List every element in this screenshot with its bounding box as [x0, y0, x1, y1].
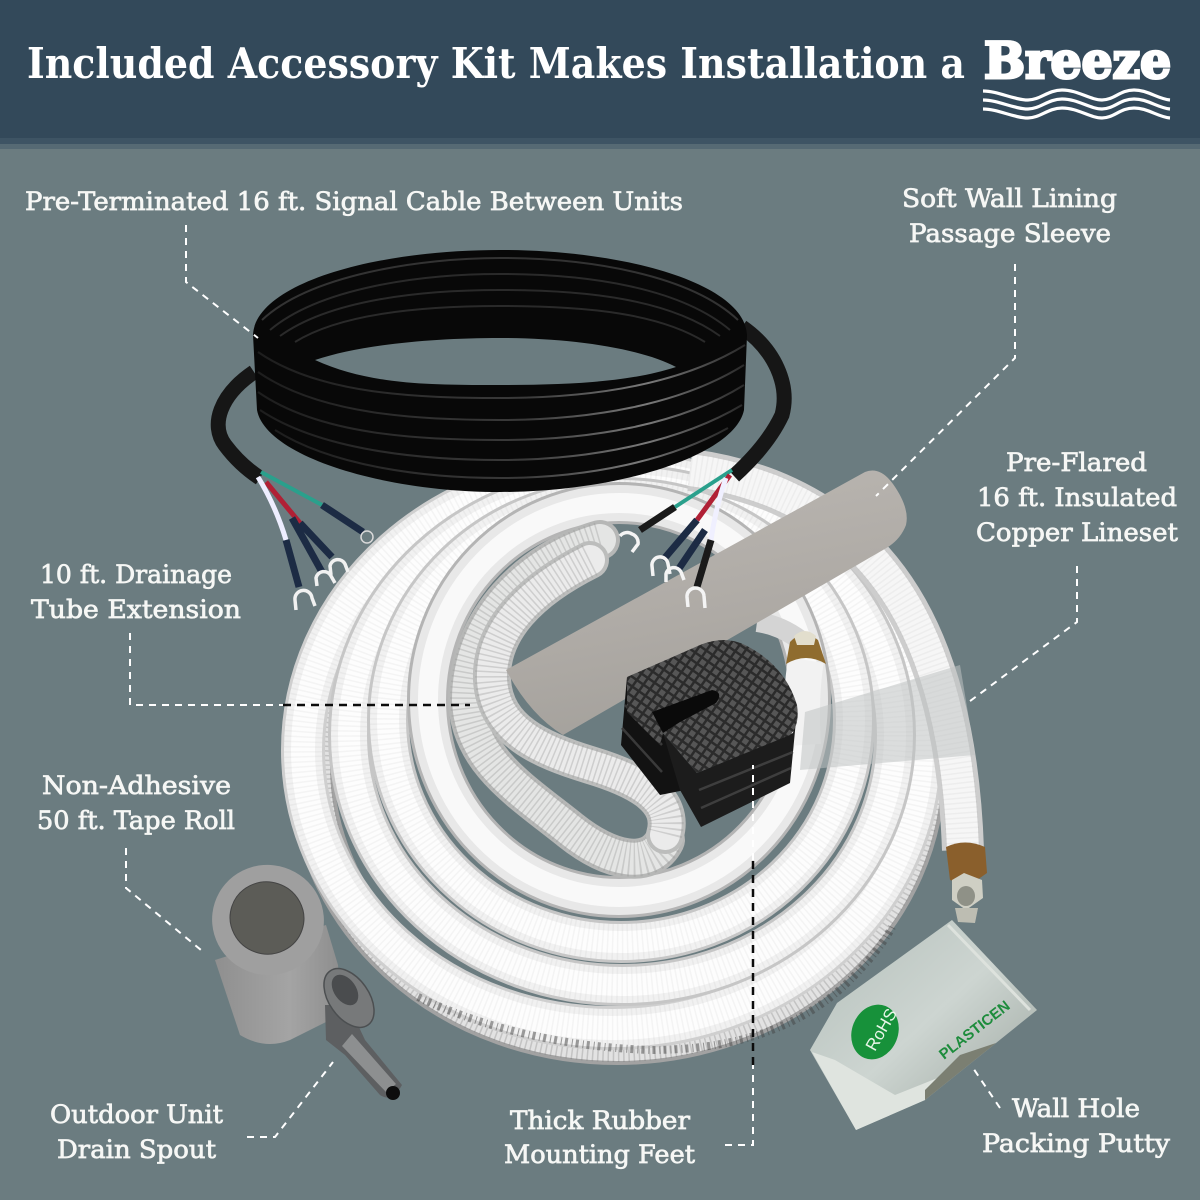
leader: passage sleeve — [876, 264, 1015, 496]
label: tape roll: Non-Adhesive — [42, 771, 231, 800]
putty packet: PLASTICEN — [936, 997, 1013, 1063]
inner lineset end with brass fitting — [757, 622, 826, 745]
left wires and terminals — [258, 472, 373, 610]
label: drain spout — [50, 1100, 223, 1164]
label: copper lineset: Pre-Flared — [1006, 448, 1147, 477]
right wires and terminals — [620, 470, 732, 608]
putty packet: RoHS — [862, 1005, 901, 1054]
foam passage sleeve — [506, 470, 907, 735]
label: signal cable: Pre-Terminated 16 ft. Signal Cable Between Units — [25, 187, 683, 216]
lineset second ring — [349, 485, 895, 985]
label: packing putty — [982, 1094, 1171, 1158]
logo: Breeze with waves — [983, 31, 1171, 118]
tape roll — [198, 850, 339, 1044]
label: mounting feet: Thick Rubber — [510, 1106, 690, 1135]
label: mounting feet — [504, 1106, 695, 1169]
leader: drain spout — [247, 1062, 333, 1137]
drainage tube — [468, 540, 667, 859]
leader: drainage tube — [130, 633, 470, 705]
label: wall lining sleeve: Passage Sleeve — [909, 219, 1111, 248]
label: wall lining sleeve: Soft Wall Lining — [902, 184, 1117, 213]
label: tape roll: 50 ft. Tape Roll — [37, 806, 235, 835]
leader: packing putty — [971, 1065, 1000, 1108]
insulated copper lineset coil — [303, 470, 987, 1050]
leader: mounting feet — [725, 765, 753, 1145]
signal cable coil — [218, 250, 784, 610]
lineset bottom stack — [311, 490, 923, 1042]
cable tails — [218, 327, 784, 478]
logo: Breeze with waves: Breeze — [984, 31, 1171, 90]
leader: signal cable — [186, 225, 258, 338]
leader: tape roll — [126, 848, 201, 950]
label: copper lineset: Copper Lineset — [976, 518, 1178, 547]
label: drainage tube: Tube Extension — [31, 595, 241, 624]
printed lineset text — [418, 927, 892, 1050]
label: tape roll — [37, 771, 235, 835]
coil body — [253, 250, 747, 492]
title: Included Accessory Kit Makes Installation a — [27, 39, 965, 88]
coil highlights — [258, 258, 745, 478]
label: packing putty: Packing Putty — [982, 1129, 1171, 1158]
header band — [0, 0, 1200, 149]
lineset third ring — [388, 498, 854, 942]
drain spout — [314, 959, 402, 1100]
wrapped tape on lineset — [800, 665, 975, 770]
lineset tail with flared end — [690, 470, 987, 923]
putty packet — [810, 920, 1037, 1130]
label: drainage tube — [31, 560, 241, 624]
label: copper lineset — [976, 448, 1178, 547]
label: packing putty: Wall Hole — [1012, 1094, 1140, 1123]
label: drain spout: Outdoor Unit — [50, 1100, 223, 1129]
label: mounting feet: Mounting Feet — [504, 1140, 695, 1169]
lineset inner ring — [428, 503, 810, 897]
lineset outer ring — [303, 472, 921, 1028]
leader: copper lineset — [966, 566, 1077, 704]
label: drainage tube: 10 ft. Drainage — [40, 560, 232, 589]
label: wall lining sleeve — [902, 184, 1117, 248]
label: drain spout: Drain Spout — [57, 1135, 216, 1164]
rubber mounting feet — [621, 640, 798, 827]
label: copper lineset: 16 ft. Insulated — [977, 483, 1177, 512]
